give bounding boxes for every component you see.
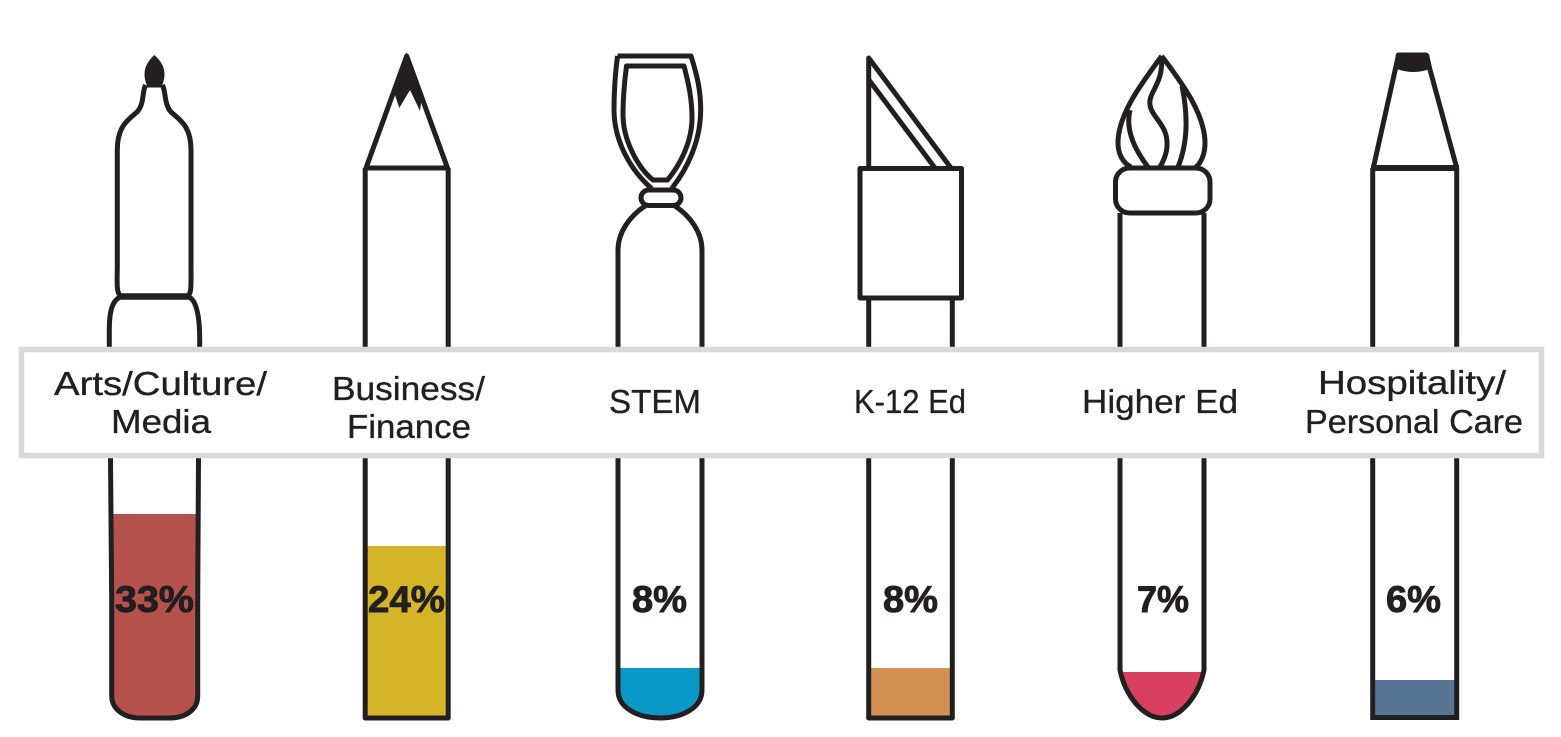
marker fill level <box>113 514 197 717</box>
label: Business/Finance: Finance <box>347 408 471 445</box>
value: 33%: 33% <box>115 579 194 620</box>
marker tip <box>144 55 164 86</box>
marker: Arts/Culture/Media 33% <box>109 55 200 718</box>
marker outline <box>109 85 200 718</box>
pencil lead <box>394 52 422 111</box>
black cap <box>1394 54 1432 72</box>
value: 7%: 7% <box>1137 579 1189 620</box>
ferrule <box>1116 168 1210 213</box>
label: Arts/Culture/Media: Arts/Culture/ <box>54 365 268 402</box>
value: 8% STEM: 8% <box>632 579 687 620</box>
label: Hospitality/Personal Care: Personal Care <box>1305 403 1523 440</box>
pencil: Business/Finance 24% <box>365 52 448 718</box>
pencil fill level <box>366 546 447 718</box>
label: Arts/Culture/Media <box>54 365 268 440</box>
marker collar line <box>121 293 189 300</box>
tapered tip <box>1374 55 1456 167</box>
label: Arts/Culture/Media: Media <box>111 403 212 440</box>
brush: STEM 8% <box>614 56 702 718</box>
value: 6%: 6% <box>1386 579 1441 620</box>
STEM fill level <box>620 668 700 717</box>
chisel handle <box>869 298 952 718</box>
chisel: K-12 Ed 8% <box>860 58 962 718</box>
paintbrush: Higher Ed 7% <box>1116 56 1210 718</box>
label band <box>22 350 1542 456</box>
value: 24%: 24% <box>368 579 445 620</box>
Higher Ed fill level <box>1122 672 1202 717</box>
chisel nib <box>869 58 951 168</box>
pencil outline <box>365 56 448 718</box>
K-12 fill level <box>870 668 951 717</box>
STEM inner bristle <box>623 66 692 180</box>
label: Hospitality/Personal Care <box>1305 364 1523 440</box>
label: Higher Ed: Higher Ed <box>1082 383 1238 420</box>
collar <box>1371 165 1459 171</box>
label: K-12 Ed: K-12 Ed <box>854 383 966 420</box>
value: 8% K-12: 8% <box>883 579 938 620</box>
flat brush: Hospitality/Personal Care 6% <box>1371 54 1459 718</box>
STEM handle <box>618 206 702 718</box>
Hospitality fill level <box>1375 680 1455 717</box>
handle <box>1120 213 1204 718</box>
label: Hospitality/Personal Care: Hospitality/ <box>1318 364 1507 401</box>
label: Business/Finance: Business/ <box>332 370 486 407</box>
bristles <box>1118 56 1205 167</box>
handle <box>1373 168 1457 718</box>
label: Business/Finance <box>332 370 486 445</box>
label: STEM: STEM <box>609 383 701 420</box>
chisel ferrule <box>860 168 962 298</box>
STEM ring <box>641 190 681 206</box>
STEM outer bristle <box>614 56 701 188</box>
